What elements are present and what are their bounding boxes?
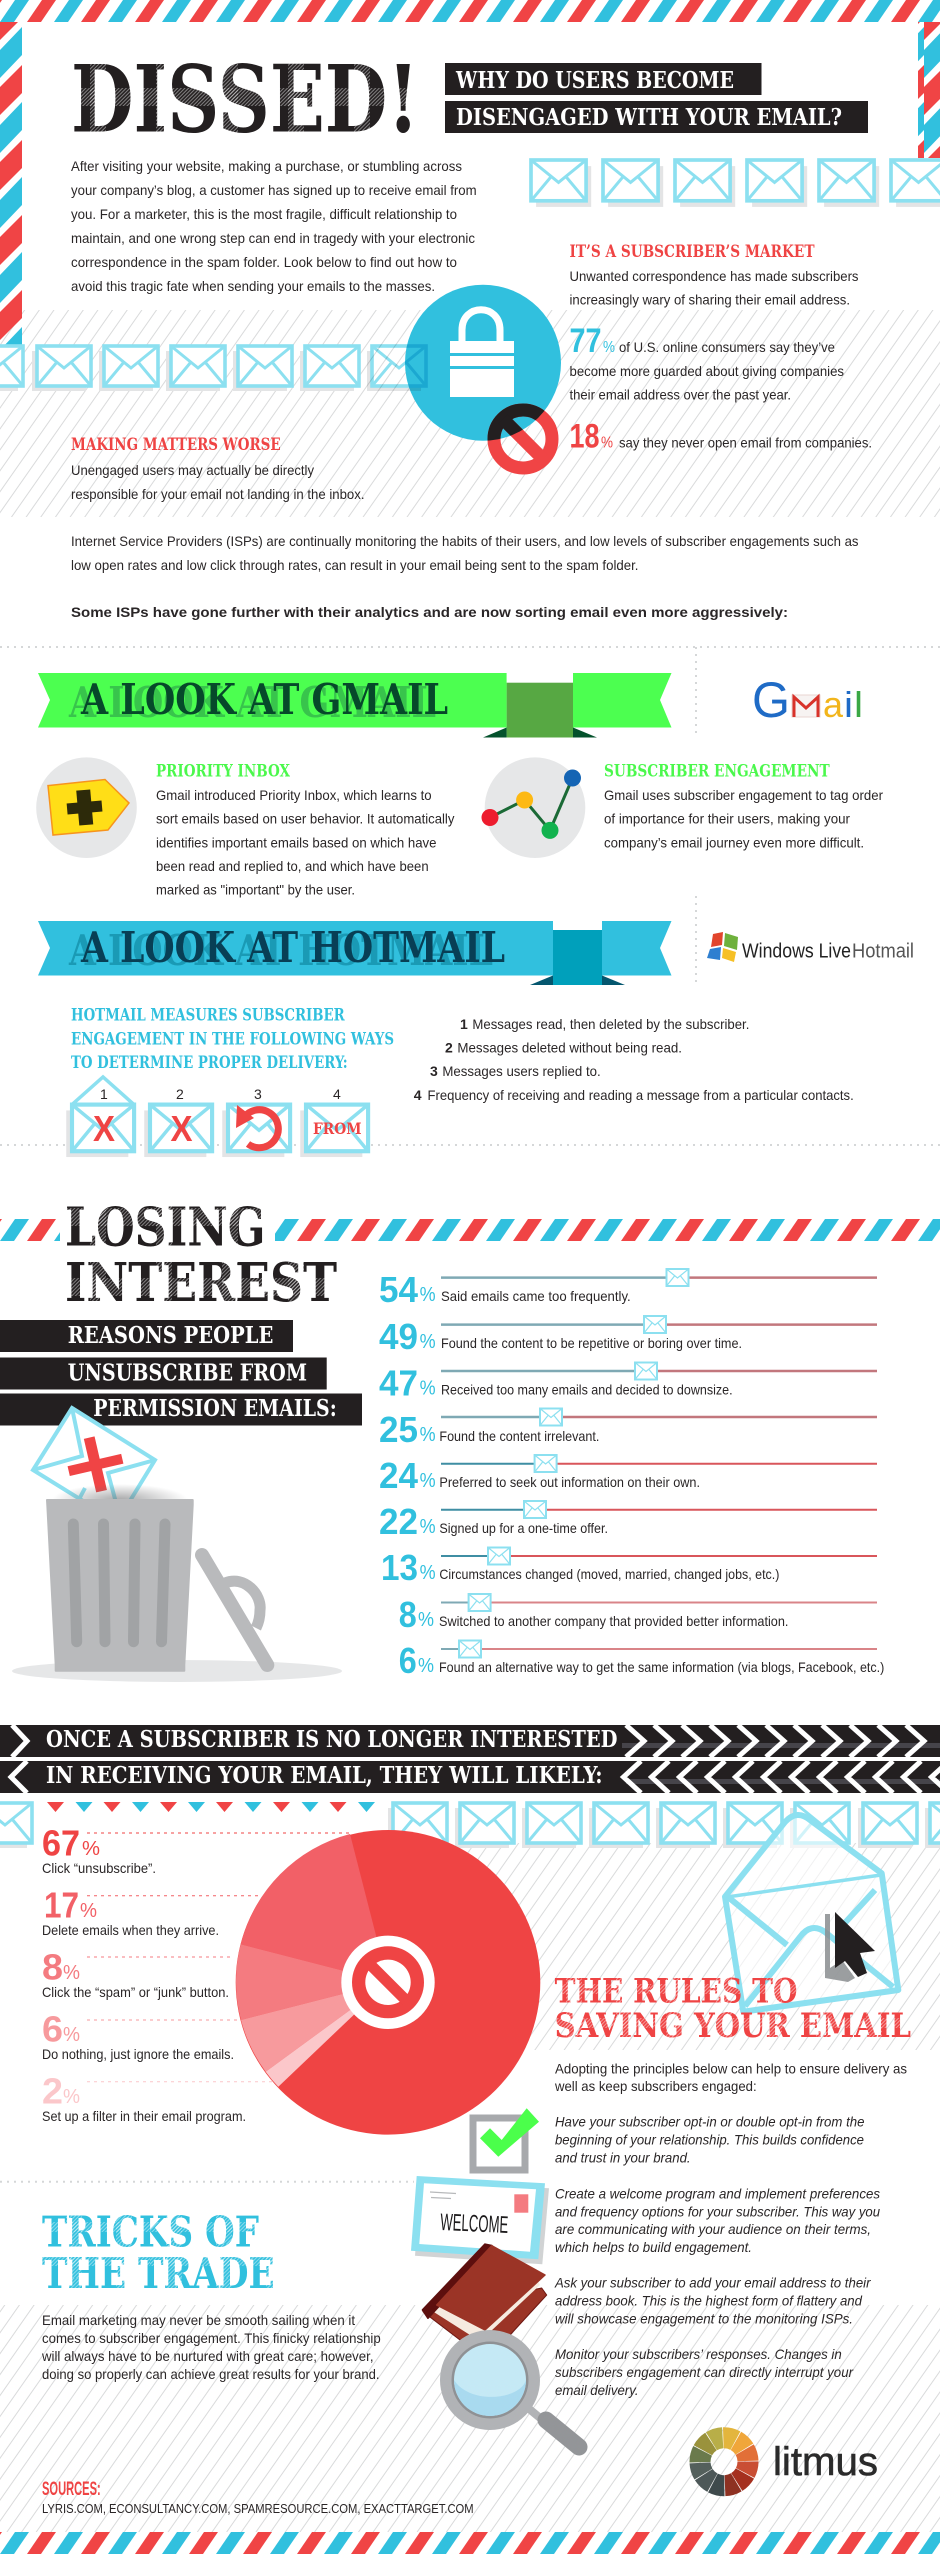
icon: checkbox with green check	[473, 2108, 539, 2170]
stat row: 24%	[379, 1455, 877, 1496]
stat row: 8%	[399, 1594, 877, 1635]
text block: it's a subscriber's market: of U.S. online consumers say they’ve	[619, 339, 835, 355]
stat row: 24%: %	[420, 1470, 436, 1492]
text block: tricks of the trade: comes to subscriber engagement. This finicky relationship	[42, 2330, 381, 2346]
text block: hotmail measures	[71, 1006, 394, 1073]
sources	[42, 2479, 474, 2516]
text block: subscriber engagement: SUBSCRIBER ENGAGEMENT	[604, 762, 830, 782]
text block: subscriber engagement: of importance for their users, making your	[604, 811, 850, 827]
icon: engagement line graph	[482, 757, 585, 858]
numbered list: engagement measures: Frequency of receiving and reading a message from a particular contacts.	[428, 1087, 854, 1103]
icons: four envelopes: FROM	[313, 1119, 362, 1138]
text block: priority inbox: identifies important emails based on which have	[156, 834, 437, 850]
rule 3: Ask your subscriber to add your email address to their	[554, 2274, 872, 2290]
text block: it's a subscriber's market: 18	[570, 418, 600, 456]
text block: subscriber engagement	[604, 762, 883, 850]
icons: four envelopes: 4	[333, 1086, 341, 1102]
icon: trash can with lid	[12, 1500, 342, 1682]
text block: ISPs	[71, 533, 858, 620]
icons: four envelopes: 3	[254, 1086, 262, 1102]
text block: adopting the principles: well as keep subscribers engaged:	[554, 2078, 757, 2094]
text block: making matters worse: Unengaged users may actually be directly	[71, 462, 314, 478]
banner: a look at hotmail	[38, 921, 672, 985]
text block: it's a subscriber's market: %	[603, 339, 615, 356]
stat row: 13%	[381, 1547, 877, 1588]
airmail border: bottom stripes	[0, 2532, 940, 2554]
logo: Windows Live Hotmail: Windows Live	[742, 941, 851, 963]
intro paragraph: you. For a marketer, this is the most fragile, difficult relationship to	[71, 206, 457, 222]
envelope row: middle	[0, 1803, 940, 1848]
text block: priority inbox: been read and replied to, and which have been	[156, 858, 429, 874]
stat row: 8%: %	[418, 1609, 434, 1631]
text block: adopting the principles: Adopting the principles below can help to ensure delivery as	[555, 2060, 907, 2076]
title: losing interest: LOSING	[65, 1197, 266, 1259]
stat row: 24%: Preferred to seek out information on their own.	[439, 1474, 700, 1490]
text block: hotmail measures: ENGAGEMENT IN THE FOLLOWING WAYS	[71, 1029, 394, 1049]
rule 2: Create a welcome program and implement preferences	[555, 2185, 880, 2201]
rule 4: subscribers engagement can directly interrupt your	[555, 2364, 854, 2380]
text block: it's a subscriber's market	[570, 242, 872, 456]
logo: Windows Live Hotmail	[707, 932, 914, 963]
text block: it's a subscriber's market: Unwanted correspondence has made subscribers	[570, 268, 858, 284]
legend: pie values: 67	[42, 1822, 80, 1864]
text block: ISPs: Internet Service Providers (ISPs) are continually monitoring the habits of their users, and low levels of subscriber engagements such as	[71, 533, 858, 549]
rule 4: email delivery.	[555, 2382, 638, 2398]
sources: LYRIS.COM, ECONSULTANCY.COM, SPAMRESOURCE.COM, EXACTTARGET.COM	[42, 2501, 474, 2516]
legend: pie values: %	[63, 2024, 80, 2046]
text block: priority inbox: marked as "important" by the user.	[156, 882, 355, 898]
numbered list: engagement measures: Messages read, then deleted by the subscriber.	[472, 1016, 749, 1032]
text block: priority inbox: Gmail introduced Priority Inbox, which learns to	[156, 787, 432, 803]
chevron banner: in receiving your email: IN RECEIVING YOUR EMAIL, THEY WILL LIKELY:	[46, 1762, 602, 1789]
banner: a look at gmail: A LOOK AT GMAIL	[68, 678, 436, 727]
legend: pie values: Set up a filter in their email program.	[42, 2108, 246, 2124]
stat row: 47%: %	[420, 1378, 436, 1400]
intro paragraph	[71, 158, 477, 294]
icons: four envelopes: 1	[100, 1086, 108, 1102]
logo: Gmail: a	[823, 684, 844, 725]
icon: padlock in blue circle	[405, 285, 561, 441]
title: DISSED!: DISSED!	[71, 44, 419, 154]
legend: pie values: 6	[42, 2008, 63, 2050]
stat row: 6%: Found an alternative way to get the same information (via blogs, Facebook, etc.)	[439, 1659, 884, 1675]
text block: it's a subscriber's market: their email address over the past year.	[570, 387, 791, 403]
text block: ISPs: Some ISPs have gone further with their analytics and are now sorting email even more aggressively:	[71, 604, 788, 620]
intro paragraph: your company’s blog, a customer has signed up to receive email from	[71, 182, 477, 198]
legend: pie values: Click “unsubscribe”.	[42, 1860, 156, 1876]
subtitle in black bars	[445, 63, 868, 133]
text block: it's a subscriber's market: increasingly wary of sharing their email address.	[570, 292, 850, 308]
stat row: 22%: Signed up for a one-time offer.	[439, 1520, 608, 1536]
stat row: 22%: %	[420, 1516, 436, 1538]
legend: pie values: 17	[44, 1884, 79, 1926]
stat row: 22%	[379, 1501, 877, 1542]
subtitle bars: reasons people unsubscribe	[0, 1320, 362, 1426]
stat row: 54%: Said emails came too frequently.	[441, 1288, 631, 1304]
stat row: 47%: 47	[379, 1362, 418, 1404]
numbered list: engagement measures	[414, 1016, 854, 1103]
legend: pie values	[42, 1822, 246, 2124]
icon: priority inbox tag	[36, 757, 137, 858]
logo: Windows Live Hotmail: Hotmail	[852, 941, 914, 963]
legend: pie values: %	[80, 1900, 97, 1922]
numbered list: engagement measures: 3	[430, 1063, 438, 1079]
stat row: 49%	[379, 1316, 877, 1357]
text block: it's a subscriber's market: %	[601, 434, 613, 452]
stat row: 8%: Switched to another company that provided better information.	[439, 1613, 788, 1629]
text block: making matters worse	[71, 435, 364, 502]
chevron banner: once a subscriber	[0, 1725, 940, 1757]
rule 1	[555, 2114, 865, 2166]
background hatch: upper	[0, 310, 940, 517]
envelope row: upper right	[531, 160, 940, 207]
legend: pie values: 8	[42, 1946, 63, 1988]
text block: it's a subscriber's market: 77	[570, 322, 602, 360]
icons: four envelopes: 2	[176, 1086, 184, 1102]
text block: priority inbox	[156, 762, 454, 898]
legend: pie values: Delete emails when they arrive.	[42, 1922, 219, 1938]
intro paragraph: After visiting your website, making a purchase, or stumbling across	[71, 158, 462, 174]
logo: Gmail: i	[844, 684, 853, 725]
numbered list: engagement measures: Messages users replied to.	[442, 1063, 601, 1079]
numbered list: engagement measures: 1	[460, 1016, 468, 1032]
heading: tricks of the trade: THE TRADE	[42, 2249, 275, 2298]
rule 3	[554, 2274, 872, 2326]
subtitle bars: reasons people unsubscribe: REASONS PEOPLE	[68, 1322, 273, 1349]
stat row: 6%: %	[418, 1655, 434, 1677]
stat row: 13%: %	[420, 1562, 436, 1584]
heading: tricks of the trade: TRICKS OF	[42, 2208, 259, 2257]
stat row: 6%: 6	[399, 1640, 417, 1681]
text block: subscriber engagement: company’s email journey even more difficult.	[604, 834, 864, 850]
background hatch: rules section	[440, 1843, 940, 2050]
rule 4	[555, 2346, 854, 2398]
envelope row: left	[0, 346, 426, 391]
rule 3: address book. This is the highest form of flattery and	[555, 2292, 863, 2308]
text block: it's a subscriber's market: IT’S A SUBSCRIBER’S MARKET	[570, 242, 815, 262]
triangle bunting	[47, 1802, 375, 1812]
numbered list: engagement measures: 4	[414, 1087, 422, 1103]
text block: adopting the principles	[554, 2060, 907, 2094]
rule 1: beginning of your relationship. This builds confidence	[555, 2132, 864, 2148]
heading: the rules to saving your email: THE RULES TO	[555, 1972, 797, 2012]
text block: subscriber engagement: Gmail uses subscriber engagement to tag order	[604, 787, 883, 803]
legend leader lines	[87, 1833, 350, 2082]
stat row: 22%: 22	[379, 1501, 418, 1542]
banner: a look at gmail	[38, 673, 672, 738]
rule 1: and trust in your brand.	[555, 2150, 691, 2166]
icon: address book	[423, 2244, 547, 2340]
subtitle bars: reasons people unsubscribe: UNSUBSCRIBE FROM	[68, 1360, 307, 1387]
heading: tricks of the trade	[42, 2208, 275, 2298]
legend: pie values: %	[63, 1962, 80, 1984]
icons: four envelopes: X	[170, 1108, 192, 1149]
intro paragraph: maintain, and one wrong step can end in tragedy with your electronic	[71, 230, 475, 246]
pie chart	[236, 1830, 540, 2135]
icon: welcome postcard: WELCOME	[440, 2209, 509, 2239]
icon: envelope going into trash can	[33, 1408, 188, 1522]
stat row: 13%: 13	[381, 1547, 418, 1588]
rule 4: Monitor your subscribers’ responses. Changes in	[555, 2346, 842, 2362]
logo: Gmail: l	[854, 684, 863, 725]
stat row: 25%: Found the content irrelevant.	[439, 1428, 599, 1444]
text block: tricks of the trade: doing so properly can achieve great results for your brand.	[42, 2366, 380, 2382]
subtitle bars: reasons people unsubscribe: PERMISSION EMAILS:	[93, 1395, 337, 1422]
text block: ISPs: low open rates and low click through rates, can result in your email being sent to the spam folder.	[71, 557, 638, 573]
numbered list: engagement measures: Messages deleted without being read.	[457, 1040, 682, 1056]
stat row: 54%: %	[420, 1284, 436, 1306]
legend: pie values: Do nothing, just ignore the emails.	[42, 2046, 234, 2062]
icon: welcome postcard	[411, 2176, 549, 2264]
rule 2: and frequency options for your subscriber. This way you	[555, 2203, 880, 2219]
intro paragraph: avoid this tragic fate when sending your emails to the masses.	[71, 278, 435, 294]
icons: four envelopes: X	[93, 1108, 115, 1149]
stat row: 49%: Found the content to be repetitive or boring over time.	[441, 1335, 742, 1351]
stat row: 25%: %	[420, 1424, 436, 1446]
icon: no entry sign	[494, 410, 552, 468]
icons: four envelopes	[66, 1077, 368, 1157]
stat row: 6%	[399, 1640, 884, 1681]
rule 2: are communicating with your audience on their terms,	[555, 2221, 871, 2237]
legend: pie values: 2	[42, 2070, 63, 2112]
title: losing interest	[60, 1197, 337, 1314]
stat row: 8%: 8	[399, 1594, 417, 1635]
rule 2	[555, 2185, 880, 2255]
stat row: 49%: %	[420, 1331, 436, 1353]
stat row: 13%: Circumstances changed (moved, married, changed jobs, etc.)	[439, 1566, 779, 1582]
airmail border: top, left and right stripes	[0, 0, 940, 350]
logo: Gmail: G	[752, 672, 790, 728]
stat row: 24%: 24	[379, 1455, 418, 1496]
text block: priority inbox: sort emails based on user behavior. It automatically	[156, 811, 454, 827]
rule 1: Have your subscriber opt-in or double opt-in from the	[555, 2114, 865, 2130]
legend: pie values: %	[63, 2086, 80, 2108]
title: losing interest: INTEREST	[65, 1252, 337, 1314]
text block: hotmail measures: TO DETERMINE PROPER DELIVERY:	[71, 1053, 348, 1073]
legend: pie values: Click the “spam” or “junk” button.	[42, 1984, 229, 2000]
stat row: 49%: 49	[379, 1316, 418, 1357]
logo: Gmail	[752, 672, 863, 728]
banner: a look at hotmail: A LOOK AT HOTMAIL	[80, 923, 505, 972]
text block: it's a subscriber's market: say they never open email from companies.	[619, 434, 872, 450]
logo: litmus colour wheel: litmus	[773, 2440, 878, 2484]
text block: hotmail measures: HOTMAIL MEASURES SUBSCRIBER	[71, 1006, 345, 1026]
airmail stripe divider	[0, 1219, 940, 1241]
heading: the rules to saving your email	[555, 1972, 911, 2046]
stat row: 54%: 54	[379, 1269, 418, 1310]
banner: a look at hotmail: A LOOK AT HOTMAIL	[68, 926, 493, 975]
text block: making matters worse: responsible for your email not landing in the inbox.	[71, 486, 364, 502]
legend: pie values: %	[82, 1838, 100, 1860]
icon: open envelope with cursor	[725, 1815, 898, 2012]
stat row: 25%	[379, 1408, 877, 1450]
rule 2: which helps to build engagement.	[555, 2239, 752, 2255]
rule 3: will showcase engagement to the monitoring ISPs.	[555, 2310, 853, 2326]
text block: tricks of the trade	[41, 2312, 381, 2382]
chevron banner: once a subscriber: ONCE A SUBSCRIBER IS NO LONGER INTERESTED	[46, 1726, 618, 1753]
text block: it's a subscriber's market: become more guarded about giving companies	[570, 363, 844, 379]
subtitle in black bars: WHY DO USERS BECOME	[455, 67, 734, 94]
text block: making matters worse: MAKING MATTERS WORSE	[71, 435, 281, 455]
sources: SOURCES:	[42, 2479, 101, 2500]
subtitle in black bars: DISENGAGED WITH YOUR EMAIL?	[456, 104, 842, 131]
stat row: 25%: 25	[379, 1409, 418, 1450]
logo: litmus colour wheel	[700, 2438, 878, 2486]
text block: tricks of the trade: will always have to be nurtured with great care; however,	[41, 2348, 373, 2364]
icon: magnifying glass	[440, 2330, 579, 2447]
intro paragraph: correspondence in the spam folder. Look below to find out how to	[71, 254, 457, 270]
chevron banner: in receiving your email	[0, 1761, 940, 1793]
banner: a look at gmail: A LOOK AT GMAIL	[80, 675, 448, 724]
text block: tricks of the trade: Email marketing may never be smooth sailing when it	[42, 2312, 355, 2328]
stat row: 54%	[379, 1269, 877, 1310]
stat row: 47%: Received too many emails and decided to downsize.	[441, 1382, 733, 1398]
numbered list: engagement measures: 2	[445, 1040, 453, 1056]
stat row: 47%	[379, 1362, 877, 1404]
text block: priority inbox: PRIORITY INBOX	[156, 762, 291, 782]
background hatch: bottom section	[0, 2305, 940, 2532]
